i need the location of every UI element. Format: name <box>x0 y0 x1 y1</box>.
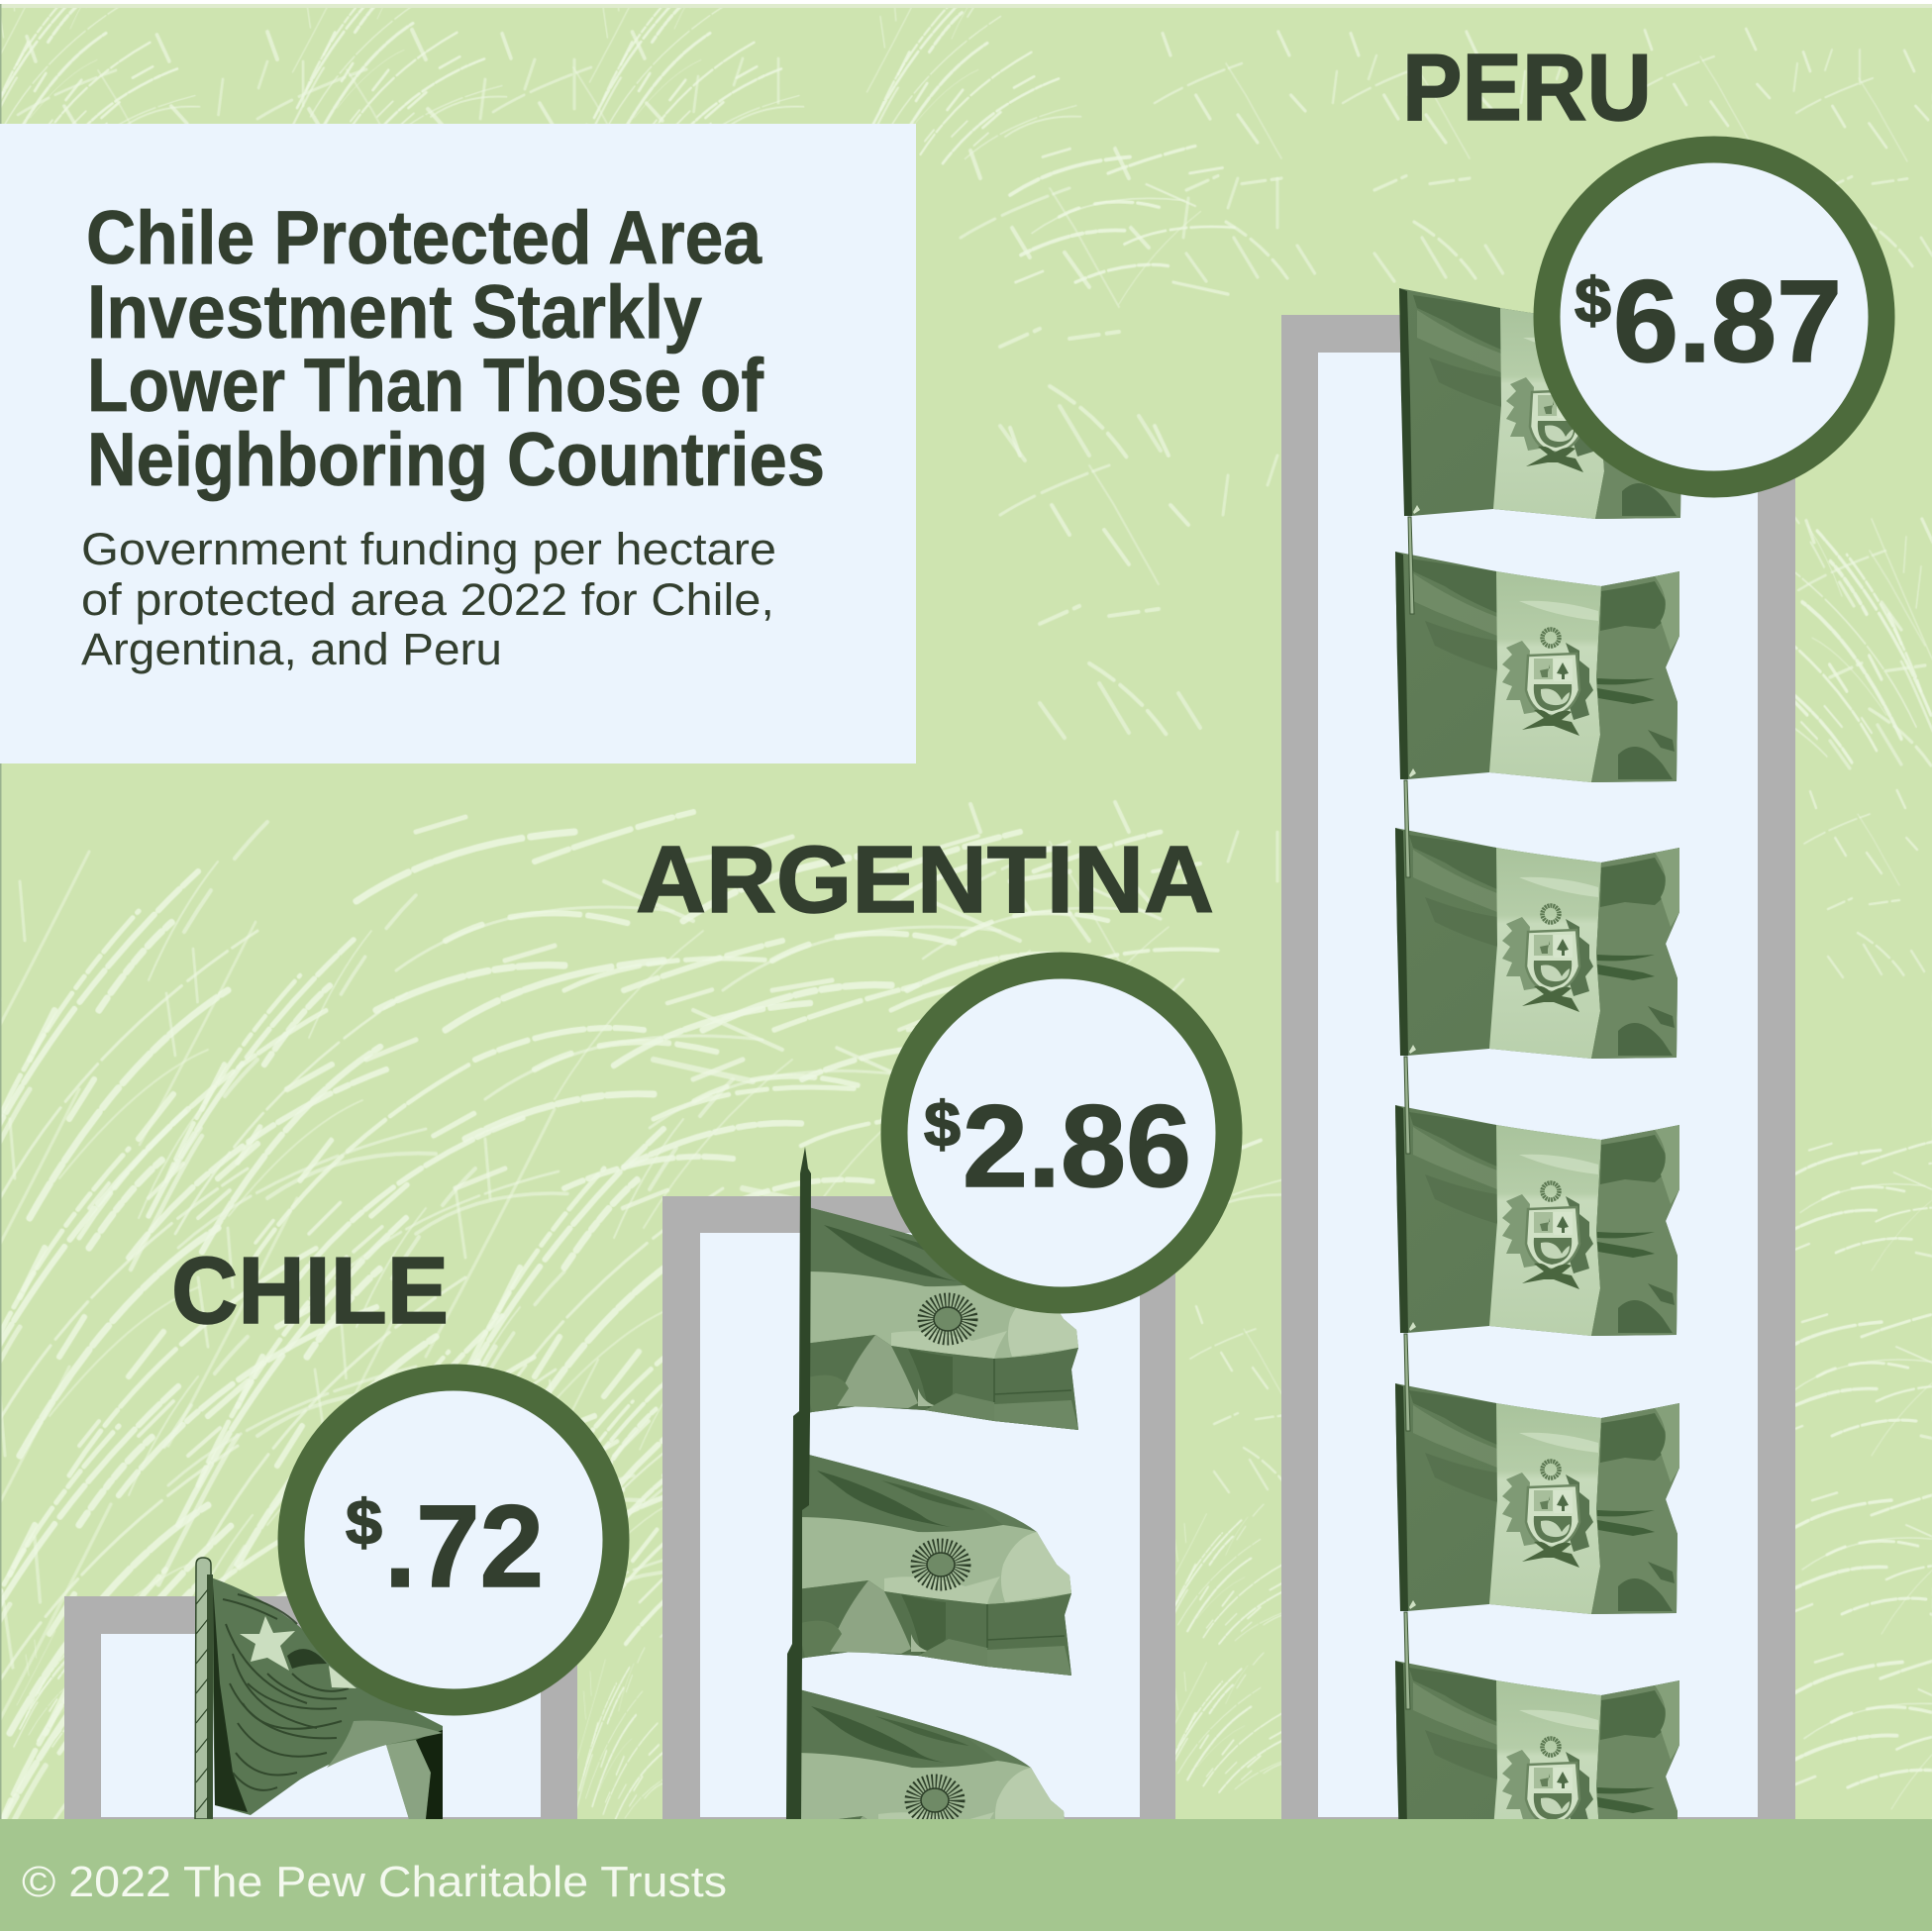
title: Lower Than Those of <box>87 344 764 428</box>
flag pole <box>195 1558 213 1819</box>
flag streaks <box>223 1594 349 1790</box>
subtitle: Argentina, and Peru <box>81 624 502 674</box>
value: $6.87: $ <box>1575 264 1611 336</box>
flag: Chile <box>195 1558 443 1819</box>
value: $2.86: 2.86 <box>963 1081 1191 1212</box>
value: $.72: .72 <box>384 1481 544 1612</box>
subtitle <box>81 524 776 674</box>
bar: Argentina <box>662 1196 1175 1819</box>
subtitle: of protected area 2022 for Chile, <box>81 574 774 625</box>
title: Chile Protected Area <box>86 196 763 280</box>
bar: Peru <box>1281 315 1795 1819</box>
flag stars <box>240 1616 356 1688</box>
title: Investment Starkly <box>87 270 702 355</box>
subtitle: Government funding per hectare <box>81 524 776 574</box>
value: $2.86: $ <box>924 1088 961 1160</box>
label: PERU: PERU <box>1402 35 1652 141</box>
value circle: Argentina <box>894 966 1229 1300</box>
value: $6.87: 6.87 <box>1613 256 1842 387</box>
flags: Argentina stack <box>786 1147 1078 1911</box>
label: ARGENTINA: ARGENTINA <box>636 827 1214 933</box>
title: Neighboring Countries <box>87 418 825 502</box>
value circle: Chile <box>291 1377 616 1702</box>
footer credit: © 2022 The Pew Charitable Trusts <box>22 1858 727 1906</box>
label: CHILE: CHILE <box>171 1238 449 1344</box>
bar: Chile <box>64 1596 577 1819</box>
value circle: Peru <box>1547 150 1881 484</box>
flags: Peru stack <box>1395 288 1683 1931</box>
value: $.72: $ <box>346 1486 382 1558</box>
panel: title and subtitle <box>0 124 916 763</box>
footer bar <box>0 1819 1932 1931</box>
title <box>86 196 825 502</box>
